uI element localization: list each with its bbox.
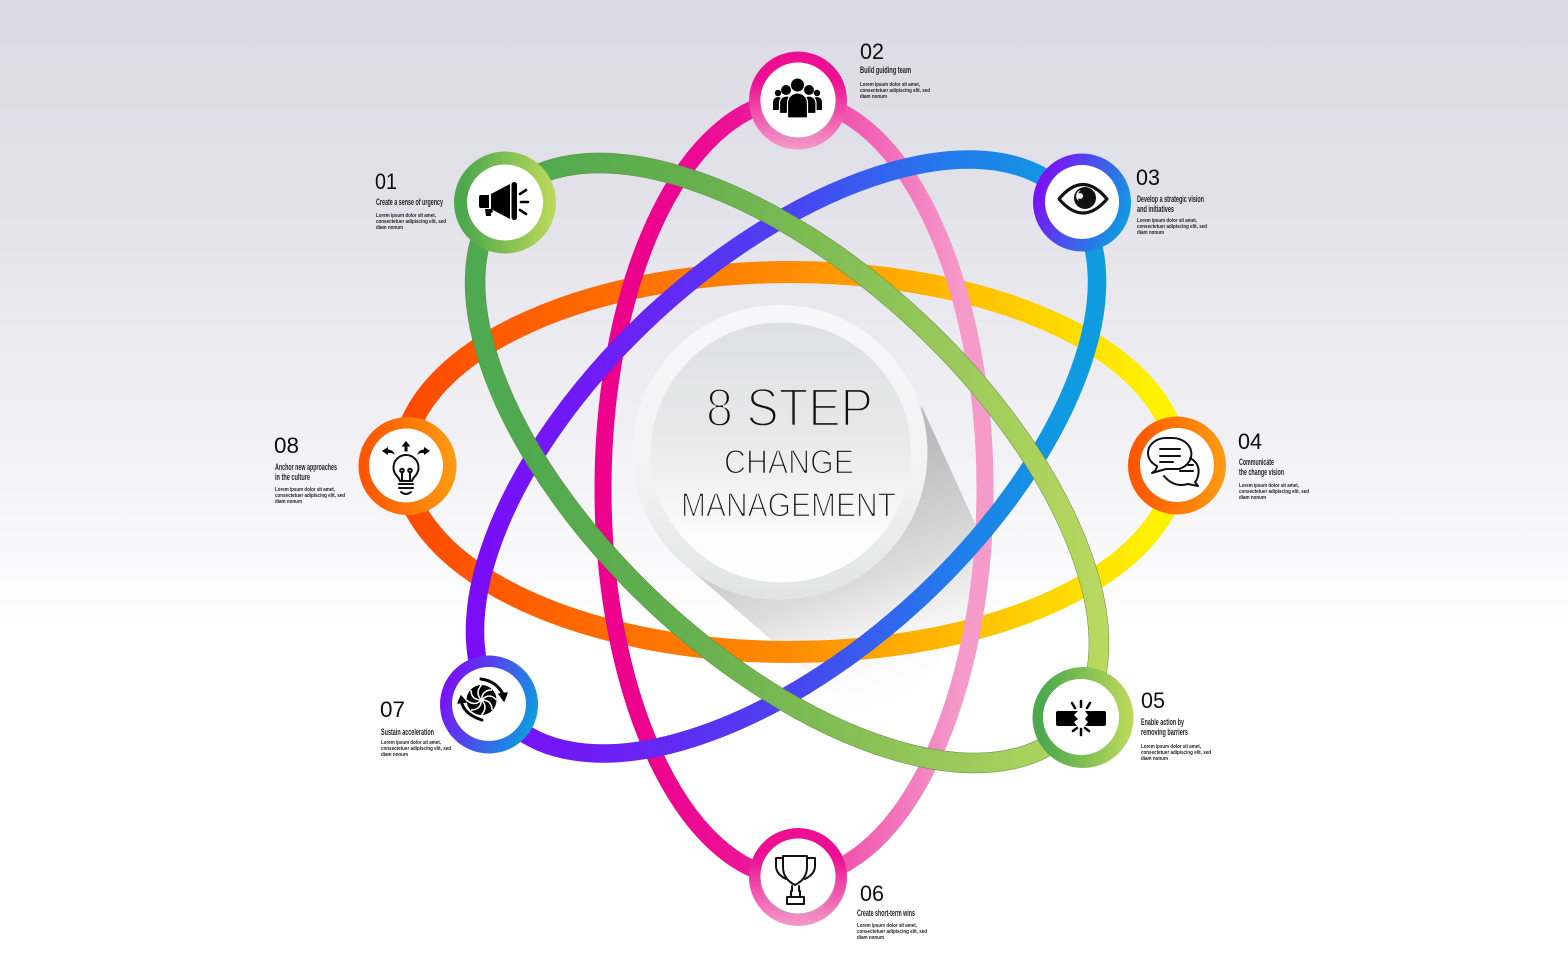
node ring 06	[749, 828, 847, 926]
label 05: 05	[1141, 688, 1165, 713]
node ring 03	[1033, 154, 1131, 252]
label 03: and initiatives	[1137, 204, 1174, 215]
label 03: 03	[1136, 165, 1160, 190]
label 06: consectetuer adipiscing elit, sed	[857, 929, 927, 935]
icon: chat bubbles	[1148, 438, 1199, 486]
orbit: green to lime	[373, 57, 1201, 869]
label 01: diam nonum	[376, 225, 403, 231]
label 02: 02	[860, 39, 884, 64]
label 06: 06	[860, 881, 884, 906]
title line: MANAGEMENT: MANAGEMENT	[681, 486, 896, 524]
step 04	[1128, 416, 1309, 514]
title	[681, 378, 896, 524]
label 04: the change vision	[1239, 467, 1284, 478]
label 07: consectetuer adipiscing elit, sed	[381, 746, 451, 752]
icon: trophy	[776, 856, 815, 904]
central disc long shadow	[683, 407, 985, 735]
icon: broken barrier	[1056, 701, 1106, 735]
label 07: 07	[380, 697, 405, 722]
label 05: diam nonum	[1141, 756, 1168, 762]
icon: eye	[1059, 184, 1107, 213]
title line: CHANGE: CHANGE	[724, 444, 854, 482]
node ring 02	[749, 52, 847, 150]
label 05: Lorem ipsum dolor sit amet,	[1141, 744, 1201, 750]
step 07	[380, 656, 538, 758]
label 01: Create a sense of urgency	[376, 197, 443, 208]
label 04: 04	[1238, 429, 1262, 454]
label 07: Lorem ipsum dolor sit amet,	[381, 740, 441, 746]
node ring 05	[1032, 667, 1134, 768]
central disc	[632, 305, 928, 600]
label 05: Enable action by	[1141, 717, 1184, 728]
label 04: Lorem ipsum dolor sit amet,	[1239, 483, 1299, 489]
label 04	[1238, 429, 1309, 501]
label 08: in the culture	[275, 472, 310, 483]
node ring 04	[1128, 416, 1226, 514]
label 08: Anchor new approaches	[275, 462, 337, 473]
label 03	[1136, 165, 1207, 236]
step 06	[749, 828, 927, 941]
step 08	[274, 417, 456, 515]
label 06	[857, 881, 927, 941]
label 07: diam nonum	[381, 752, 408, 758]
label 06: Lorem ipsum dolor sit amet,	[857, 923, 917, 929]
icon: light bulb with arrows	[382, 441, 430, 494]
label 03: Develop a strategic vision	[1137, 194, 1204, 205]
node ring 08	[358, 417, 456, 515]
label 05	[1141, 688, 1211, 762]
step 03	[1033, 154, 1207, 252]
label 06: Create short-term wins	[857, 908, 915, 919]
node ring 07	[440, 656, 538, 754]
label 01: Lorem ipsum dolor sit amet,	[376, 213, 436, 219]
label 04: consectetuer adipiscing elit, sed	[1239, 489, 1309, 495]
label 08: diam nonum	[275, 499, 302, 505]
label 05: consectetuer adipiscing elit, sed	[1141, 750, 1211, 756]
label 07	[380, 697, 451, 758]
label 02: Build guiding team	[860, 65, 911, 76]
label 04: diam nonum	[1239, 495, 1266, 501]
label 08: Lorem ipsum dolor sit amet,	[275, 487, 335, 493]
orbit: violet to blue	[372, 53, 1200, 860]
label 08: 08	[274, 433, 299, 458]
label 08: consectetuer adipiscing elit, sed	[275, 493, 345, 499]
label 01	[375, 169, 446, 231]
label 02: diam nonum	[860, 94, 887, 100]
orbit: magenta to pink	[603, 100, 985, 878]
label 01: 01	[375, 169, 397, 194]
label 07: Sustain acceleration	[381, 727, 434, 738]
title line: 8 STEP: 8 STEP	[706, 378, 873, 438]
icon: turbine with rotating arrows	[458, 679, 507, 720]
orbit: orange to yellow	[403, 272, 1177, 652]
label 03: consectetuer adipiscing elit, sed	[1137, 224, 1207, 230]
step 02	[749, 39, 930, 150]
label 02	[860, 39, 930, 100]
label 02: Lorem ipsum dolor sit amet,	[860, 82, 920, 88]
label 06: diam nonum	[857, 935, 884, 941]
label 03: diam nonum	[1137, 230, 1164, 236]
icon: team of people	[773, 78, 822, 118]
node ring 01	[454, 152, 556, 254]
label 05: removing barriers	[1141, 727, 1188, 738]
step 05	[1032, 667, 1211, 768]
label 08	[274, 433, 345, 505]
step 01	[375, 152, 556, 254]
orbit outline: green	[373, 57, 1201, 869]
label 04: Communicate	[1239, 457, 1274, 468]
label 03: Lorem ipsum dolor sit amet,	[1137, 218, 1197, 224]
icon: megaphone	[479, 182, 528, 220]
label 01: consectetuer adipiscing elit, sed	[376, 219, 446, 225]
label 02: consectetuer adipiscing elit, sed	[860, 88, 930, 94]
